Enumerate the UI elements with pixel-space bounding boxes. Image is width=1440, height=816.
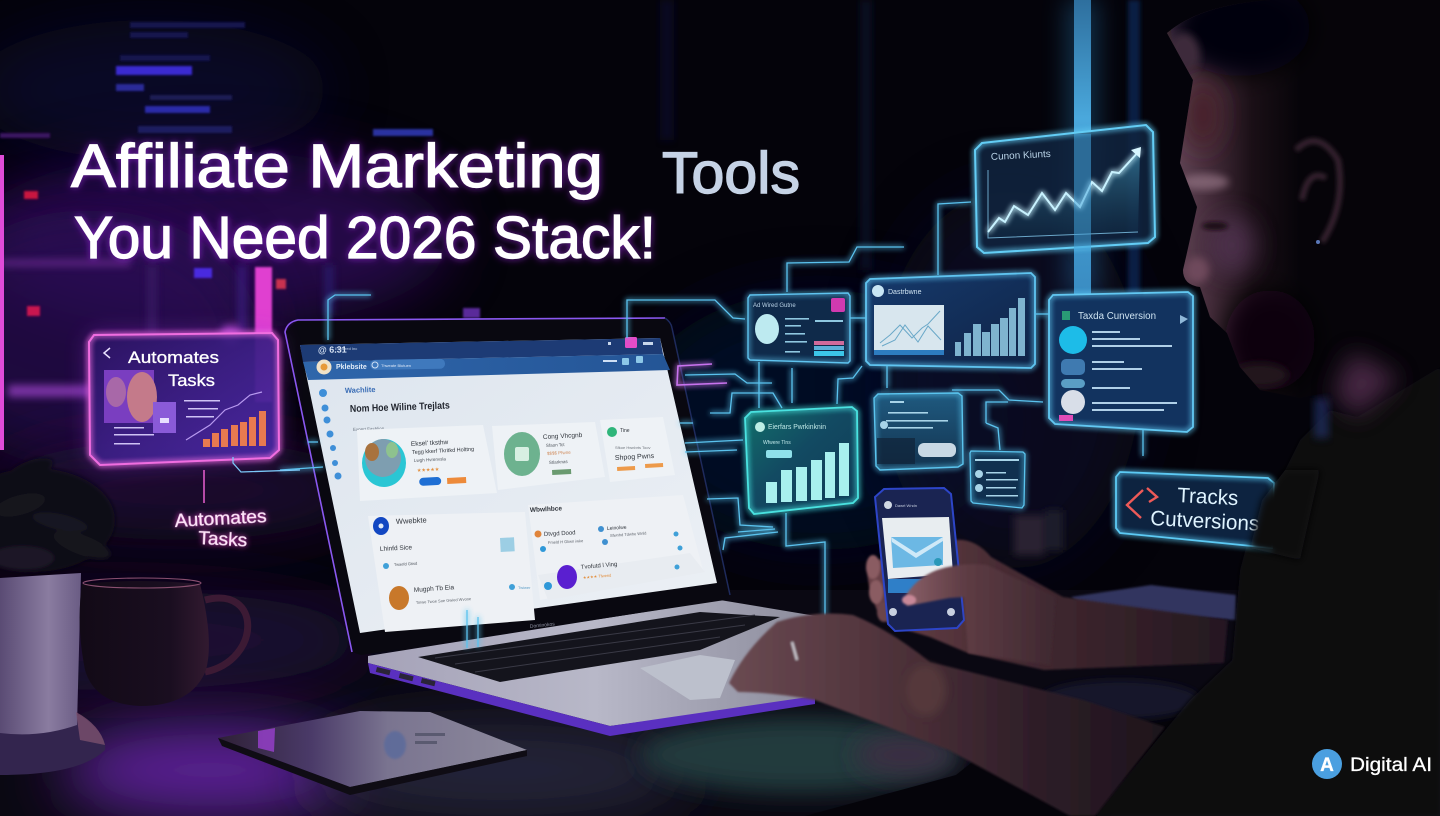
bar chart xyxy=(766,443,849,503)
wedding ring xyxy=(792,642,797,660)
lower listing panels: ★★★★ Tfweed xyxy=(583,573,611,580)
callout: tracks conversions xyxy=(1116,472,1274,548)
screen heading: Wachlite xyxy=(345,385,376,395)
app header xyxy=(303,354,670,380)
coffee mug xyxy=(80,578,248,706)
profile rows xyxy=(1092,331,1177,411)
earring xyxy=(1316,240,1320,244)
neck light xyxy=(1333,352,1400,417)
screen heading xyxy=(345,385,450,432)
panel heading: Automates xyxy=(128,348,219,367)
lower listing panels: Wbwlhbce xyxy=(530,505,563,514)
table surface xyxy=(0,585,1440,816)
lower listing panels: Mugph Tb Eia xyxy=(414,584,455,594)
rows xyxy=(880,401,948,429)
plant pot with saucer xyxy=(0,573,105,775)
panel rows xyxy=(785,318,844,356)
ear xyxy=(1296,141,1340,242)
code icon right xyxy=(1147,488,1157,502)
panel: settings card xyxy=(874,393,963,470)
lower listing panels: Sfwnhd Tdwhe Wnld xyxy=(610,530,647,538)
title xyxy=(71,132,800,271)
shirt xyxy=(1094,367,1440,816)
pot xyxy=(0,573,81,734)
header content: Pklebsite xyxy=(336,364,367,371)
collar light xyxy=(1314,398,1329,438)
far hand holding phone: fingers and forearm xyxy=(866,540,1228,670)
product card 2: Sfaon Tct xyxy=(546,442,565,448)
shield icon xyxy=(755,422,765,432)
screen heading: Expert Fashlion xyxy=(353,426,385,432)
lower listing panels xyxy=(368,495,705,632)
area chart xyxy=(988,147,1141,238)
avatar icon xyxy=(1061,390,1085,414)
rows and icons xyxy=(975,459,1019,496)
status pills xyxy=(1061,359,1085,388)
code icon xyxy=(1127,490,1143,518)
lower listing panels: Tvofutd l Ving xyxy=(581,562,618,571)
product card 1: Eksel' tksthw xyxy=(411,439,449,448)
lower listing panels: Wwebkte xyxy=(396,515,427,526)
toggle button xyxy=(918,443,956,457)
back chevron icon xyxy=(104,348,110,358)
bar chart xyxy=(203,411,266,447)
screen heading: Nom Hoe Wiline Trejlats xyxy=(350,401,450,415)
panel: automates tasks xyxy=(89,333,279,465)
title line 1: Affiliate Marketing xyxy=(71,132,603,200)
product card 1 xyxy=(357,425,497,501)
bar chart xyxy=(955,298,1025,356)
pink badge xyxy=(831,298,845,312)
saucer xyxy=(0,715,105,775)
lower listing panels: Twaefd Gtisd xyxy=(394,561,417,567)
product card 3: Sfkoe Hwnbrts Toov xyxy=(615,445,650,450)
panel: tracks conversion xyxy=(1049,292,1193,432)
laptop xyxy=(285,318,822,736)
portrait thumbnails xyxy=(104,370,176,433)
product card 2: $$$$ Pfwne xyxy=(547,450,571,456)
laptop screen xyxy=(300,337,717,633)
laptop base and keyboard xyxy=(368,600,822,736)
head with lit face xyxy=(1167,4,1314,391)
white line chart card xyxy=(874,305,944,355)
dark footer strip xyxy=(877,438,915,464)
panel heading line 2: Tasks xyxy=(168,371,215,390)
panel icon xyxy=(755,314,779,344)
laptop lid xyxy=(285,318,730,655)
highlight pill xyxy=(766,450,792,458)
watermark icon letter: A xyxy=(1320,755,1334,776)
callout text line 2: Cutversions xyxy=(1150,507,1260,536)
dashboard heading: Dastrbwne xyxy=(888,289,922,296)
text rows xyxy=(114,400,220,444)
envelope icon xyxy=(891,537,943,568)
panel: conversion chart xyxy=(975,125,1155,253)
email card xyxy=(882,517,953,579)
tablet on table xyxy=(218,711,527,795)
lower listing panels: Twiwer xyxy=(518,585,531,590)
watermark xyxy=(1312,749,1432,779)
callout: automates tasks xyxy=(174,470,267,551)
connector from automates panel to laptop xyxy=(233,457,300,472)
panel: small tracker xyxy=(970,451,1025,508)
product card 1: Tegg kkerf Tkritkd Holttng xyxy=(412,447,474,456)
pink connector squiggle xyxy=(677,364,727,385)
person xyxy=(1094,0,1440,816)
near thumb over phone xyxy=(902,564,1056,665)
panel: teal bar chart xyxy=(745,407,858,514)
phone footer icons xyxy=(889,608,897,616)
product card 1: ★★★★★ xyxy=(417,467,440,474)
callout: automates tasks: Automates xyxy=(174,506,267,531)
lid right edge xyxy=(665,318,730,595)
panel heading: Cunon Kiunts xyxy=(991,149,1051,163)
header content: Explored Inc xyxy=(335,346,357,351)
phone app row xyxy=(884,501,892,509)
watermark icon xyxy=(1312,749,1342,779)
connector lines xyxy=(280,202,1143,648)
product card 3: Shpog Pwns xyxy=(615,453,655,462)
watermark text: Digital AI xyxy=(1350,755,1432,776)
panel heading: Eierfars Pwrkinknin xyxy=(768,422,826,431)
top status bar xyxy=(300,338,663,362)
header content xyxy=(316,337,653,374)
lower listing panels: Dtvgd Dood xyxy=(544,530,576,538)
lower listing panels: Tinwe Twoe Soe Gwied Wvone xyxy=(416,596,472,605)
blurred shoulder edge over callout xyxy=(1250,470,1320,560)
sidebar icons xyxy=(319,389,342,480)
phone header text: Dawrt Wndn xyxy=(895,503,917,508)
hand and forearm on trackpad xyxy=(729,614,1165,816)
panel heading: Ad Wired Gutne xyxy=(753,303,796,309)
smartphone xyxy=(875,488,964,631)
panel: dashboard xyxy=(866,273,1035,368)
lower listing panels: Leinolwe xyxy=(607,525,627,532)
lower listing panels: Lhinfd Sice xyxy=(380,544,413,553)
plant xyxy=(0,453,115,572)
product card 2 xyxy=(492,422,605,490)
callout text line 1: Tracks xyxy=(1177,484,1239,510)
saucer highlight xyxy=(76,712,105,745)
header content: @ 6.31 xyxy=(318,344,347,355)
lower listing panels: Fmeld H Gliwn iwke xyxy=(548,538,584,545)
forward chevron xyxy=(1180,315,1188,324)
cyan profile icon xyxy=(1059,326,1087,354)
sub label: Wfwere Tlns xyxy=(763,440,791,446)
product card 3 xyxy=(600,417,675,482)
panel: small analytics xyxy=(748,293,850,363)
lid glowing edge xyxy=(285,318,665,652)
title line 2: You Need 2026 Stack! xyxy=(74,205,656,271)
phone blue row xyxy=(888,579,928,593)
heading icon xyxy=(1062,311,1070,320)
dashboard icon xyxy=(872,285,884,297)
trend line xyxy=(186,392,262,440)
beam passing over chart panel xyxy=(1074,134,1091,250)
product card 1: Lwgh Hvrenvsla xyxy=(414,456,447,463)
product card 2: Cong Vhcgnb xyxy=(543,432,583,441)
header content: Thweate Blutuen xyxy=(381,363,411,368)
callout: automates tasks: Tasks xyxy=(198,528,248,551)
glowing blue light beam xyxy=(1066,0,1098,295)
pink tag xyxy=(1059,415,1073,421)
laptop brand label: Dominokos xyxy=(530,621,556,630)
title word: Tools: Tools xyxy=(662,141,800,206)
product card 2: Stlarknas xyxy=(549,459,569,465)
product card 3: Tine xyxy=(620,428,630,434)
panel heading: Taxda Cunversion xyxy=(1078,311,1156,322)
